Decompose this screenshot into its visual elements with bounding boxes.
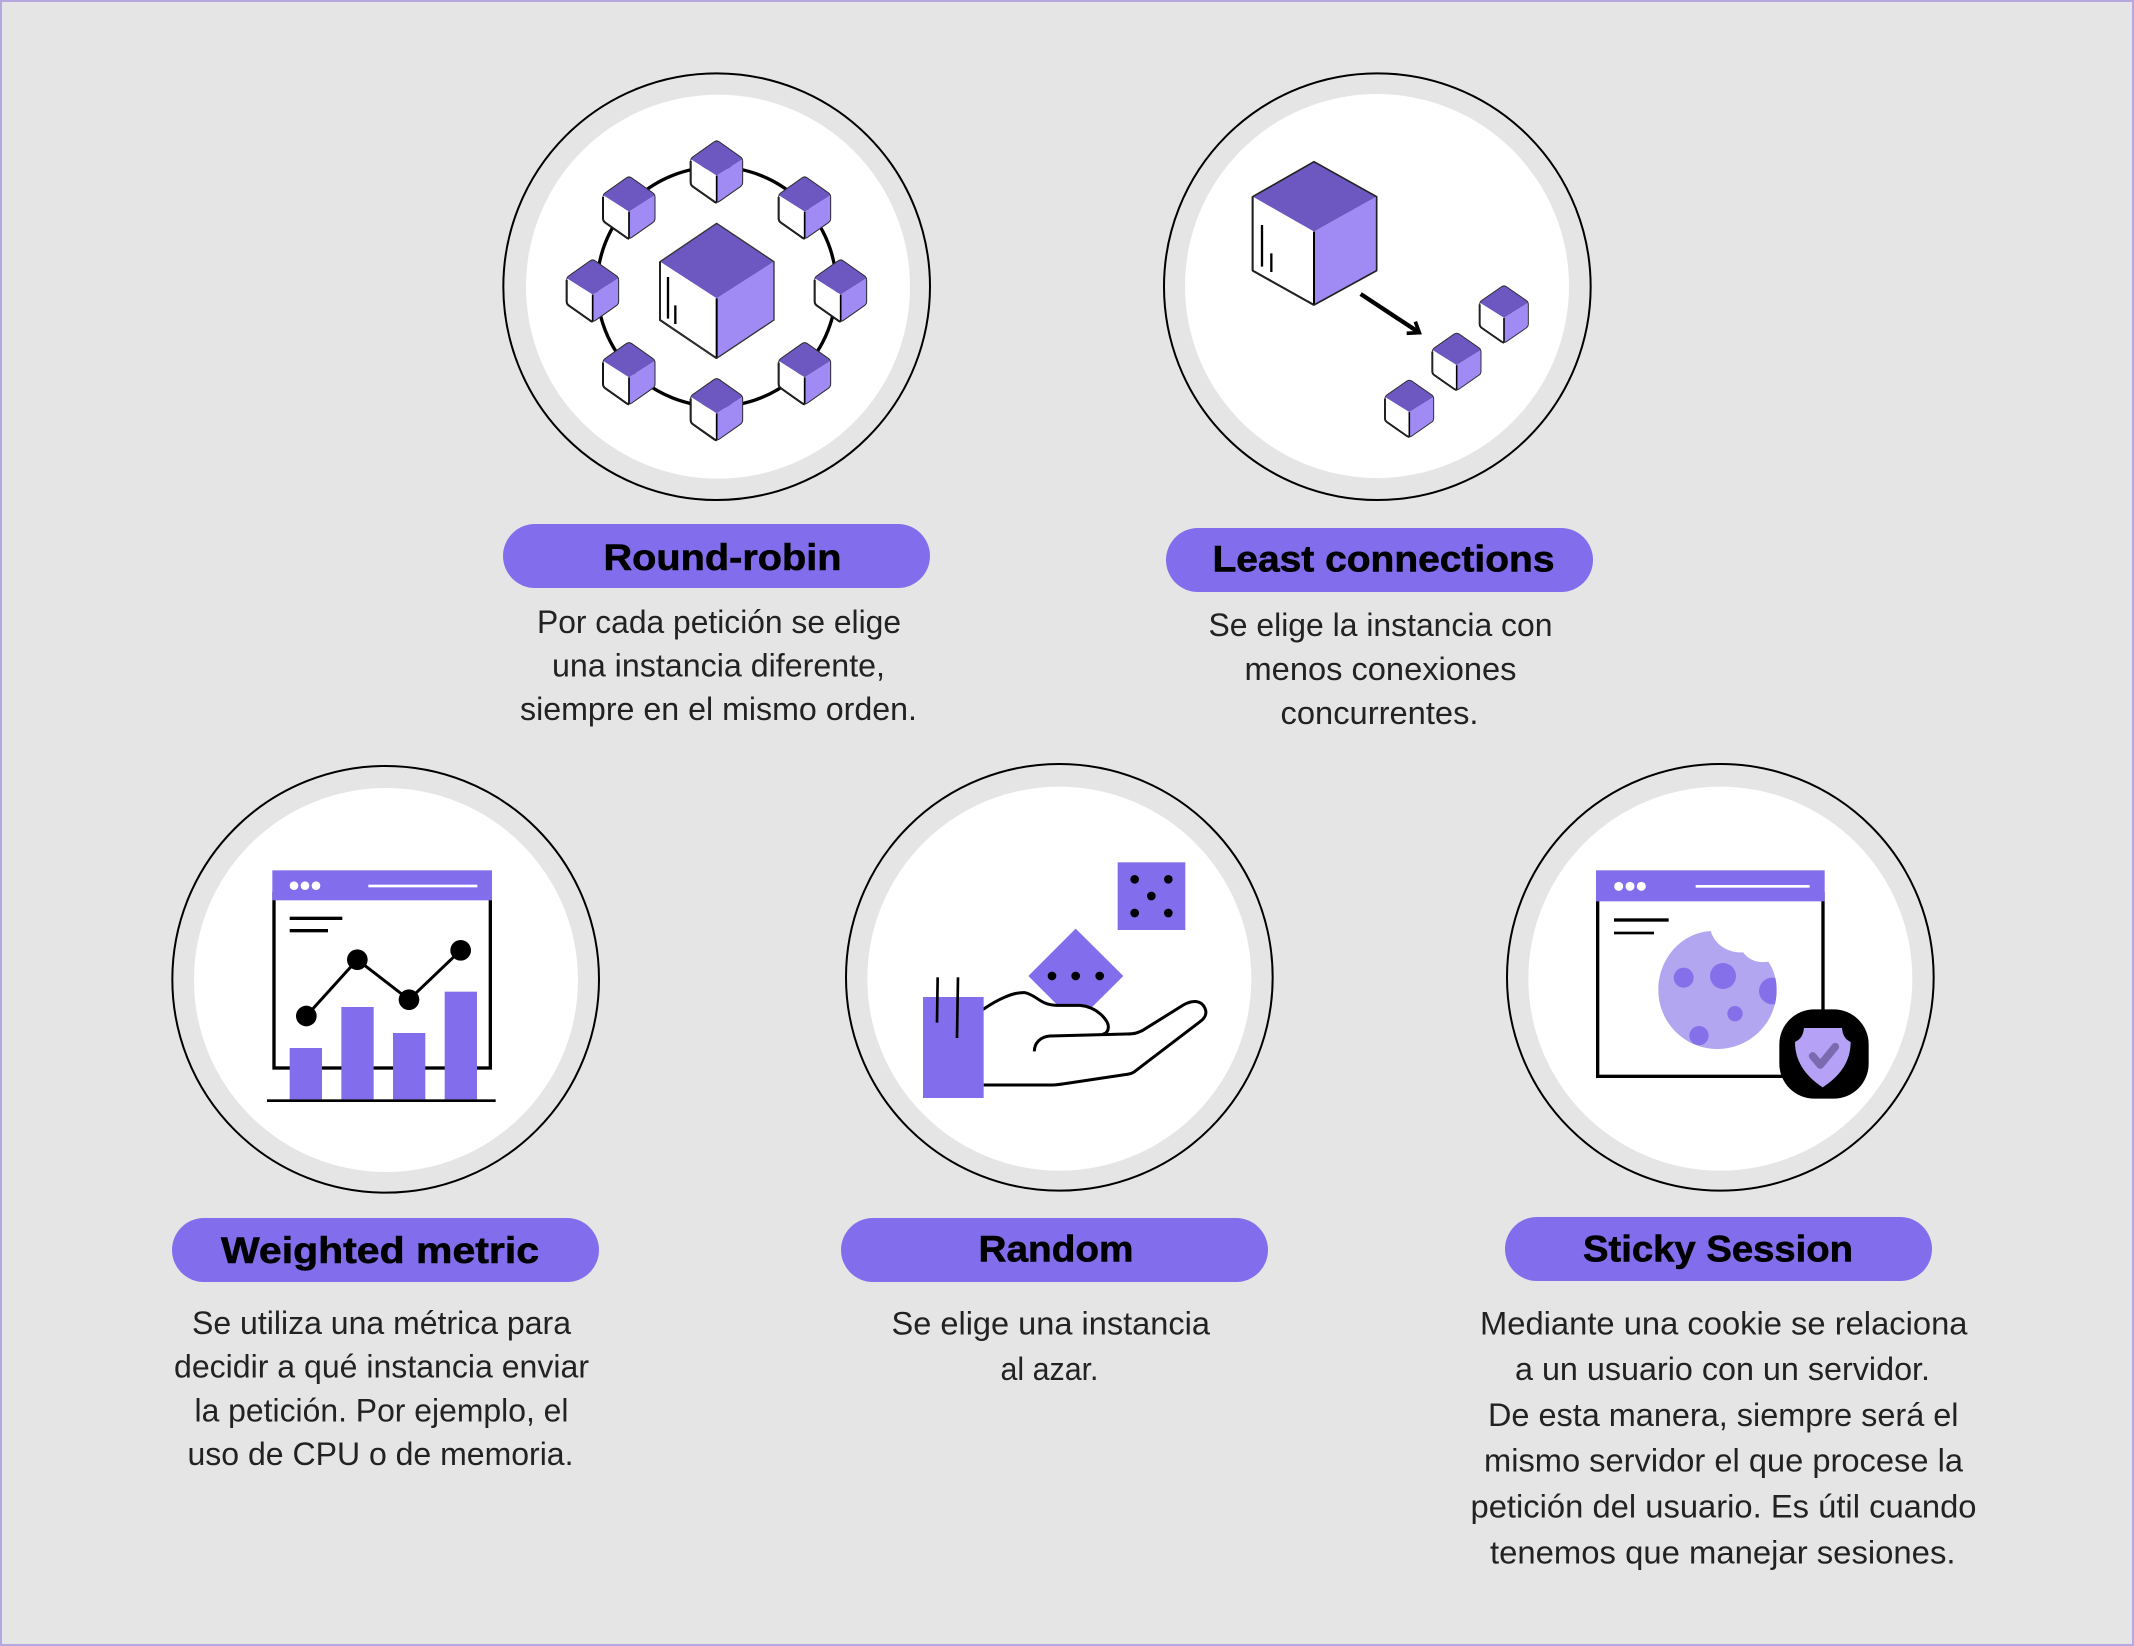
description: Sticky Session: a un usuario con un servidor. [1515, 1351, 1930, 1387]
description: Random: al azar. [1000, 1351, 1098, 1387]
description: Random: Se elige una instancia [892, 1306, 1211, 1342]
heading: Round-robin: Round-robin [604, 537, 842, 578]
pill: Weighted metric [172, 1218, 599, 1282]
description: Sticky Session: Mediante una cookie se relaciona [1480, 1306, 1968, 1342]
heading: Least connections: Least connections [1212, 538, 1554, 580]
heading: Sticky Session: Sticky Session [1583, 1228, 1853, 1270]
description: Round-robin [520, 604, 917, 727]
description: Round-robin: siempre en el mismo orden. [520, 691, 917, 727]
illustration: metrics chart window [172, 766, 599, 1193]
description: Least connections: concurrentes. [1280, 695, 1478, 731]
description: Sticky Session: petición del usuario. Es útil cuando [1470, 1488, 1976, 1524]
description: Least connections: menos conexiones [1244, 651, 1516, 687]
illustration: hand with dice [846, 764, 1273, 1191]
pill: Sticky Session [1505, 1217, 1932, 1281]
description: Least connections [1208, 607, 1552, 731]
description: Round-robin: Por cada petición se elige [537, 604, 901, 640]
description: Weighted metric: Se utiliza una métrica para [192, 1305, 572, 1341]
pill: Least connections [1166, 528, 1593, 592]
illustration: large server to small servers [1164, 73, 1591, 500]
description: Sticky Session: mismo servidor el que procese la [1484, 1442, 1964, 1478]
illustration: cookie window with shield [1507, 764, 1934, 1191]
description: Round-robin: una instancia diferente, [552, 648, 885, 684]
description: Sticky Session [1470, 1306, 1976, 1570]
heading: Weighted metric: Weighted metric [221, 1230, 539, 1271]
description: Weighted metric: uso de CPU o de memoria. [188, 1436, 574, 1472]
description: Weighted metric: decidir a qué instancia enviar [174, 1348, 589, 1384]
description: Weighted metric [174, 1305, 589, 1472]
description: Sticky Session: De esta manera, siempre será el [1488, 1397, 1958, 1433]
pill: Round-robin [503, 524, 930, 588]
description: Weighted metric: la petición. Por ejemplo, el [194, 1392, 568, 1428]
panel: Weighted metric [172, 766, 599, 1472]
panel: Least connections [1164, 73, 1593, 731]
heading: Random: Random [978, 1228, 1134, 1270]
description: Random [892, 1306, 1211, 1387]
description: Least connections: Se elige la instancia con [1208, 607, 1552, 643]
panel: Sticky Session [1470, 764, 1976, 1570]
illustration: server ring [503, 73, 930, 500]
description: Sticky Session: tenemos que manejar sesiones. [1490, 1534, 1956, 1570]
panel: Random [841, 764, 1273, 1387]
panel: Round-robin [503, 73, 930, 727]
pill: Random [841, 1218, 1268, 1282]
